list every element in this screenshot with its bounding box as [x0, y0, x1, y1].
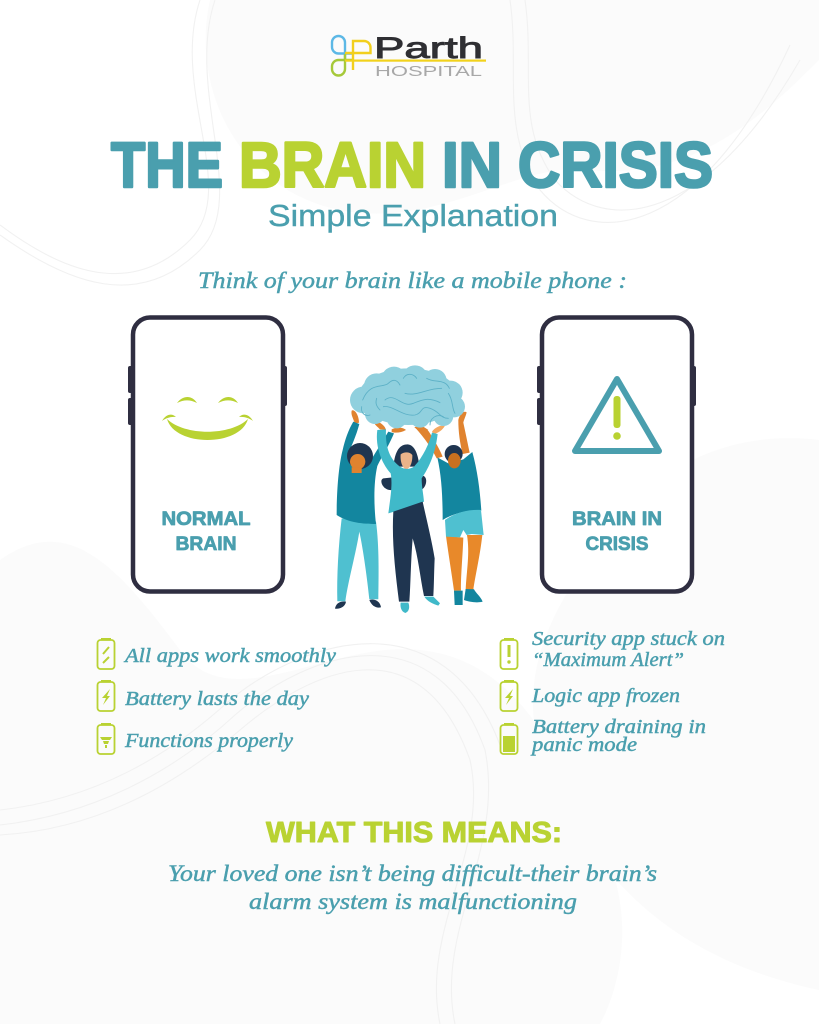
- phone label: NORMAL: [162, 508, 251, 530]
- logo subtitle: HOSPITAL: [375, 64, 482, 80]
- phone side buttons: [128, 366, 287, 425]
- icon: battery with wifi: [98, 723, 114, 754]
- item: logic app: Logic app frozen: [531, 686, 680, 707]
- illustration: three people lifting a brain: [335, 365, 484, 613]
- item: battery draining: panic mode: [530, 735, 637, 756]
- intro line: Think of your brain like a mobile phone :: [198, 268, 627, 294]
- phone label: BRAIN IN: [572, 508, 662, 530]
- icon: half-full battery: [500, 723, 518, 754]
- phone body: [133, 318, 283, 592]
- item: security app: [500, 629, 725, 671]
- item: all apps work smoothly: All apps work smoothly: [123, 646, 336, 667]
- center person: [373, 422, 445, 613]
- list: normal brain features: [98, 638, 336, 754]
- panel: normal brain phone: [128, 318, 287, 592]
- logo wordmark: Parth: [374, 32, 483, 65]
- item: all apps work smoothly: [98, 638, 336, 669]
- panel: brain in crisis phone: [537, 318, 696, 592]
- closing message: Your loved one isn’t being difficult-their brain’s: [168, 861, 657, 886]
- title: CRISIS: [518, 129, 713, 201]
- item: functions properly: [98, 723, 293, 754]
- item: battery lasts the day: [98, 680, 309, 711]
- icon: battery with bolt: [98, 680, 114, 711]
- item: logic app: [500, 680, 680, 711]
- phone label: BRAIN: [176, 533, 236, 555]
- item: battery lasts the day: Battery lasts the day: [125, 689, 309, 710]
- icon: battery with exclamation: [500, 638, 518, 669]
- item: security app: Security app stuck on: [532, 629, 725, 650]
- item: functions properly: Functions properly: [124, 731, 293, 752]
- right person: [415, 412, 484, 605]
- logo: Parth Hospital: [332, 32, 486, 80]
- subtitle: Simple Explanation: [268, 198, 558, 233]
- icon: smiling face: [162, 397, 253, 440]
- list: brain in crisis symptoms: [500, 629, 725, 756]
- title: THE: [111, 129, 223, 201]
- logo rule: [345, 60, 486, 62]
- title: BRAIN: [239, 129, 426, 201]
- phone label: CRISIS: [586, 533, 648, 555]
- title: IN: [442, 129, 502, 201]
- title: [111, 129, 713, 201]
- logo icon: [332, 36, 370, 76]
- heading: what this means: WHAT THIS MEANS:: [266, 817, 562, 849]
- icon: battery with bolt: [500, 680, 518, 711]
- icon: battery with sparks: [98, 638, 114, 669]
- icon: warning triangle: [575, 379, 659, 451]
- brain: [350, 365, 465, 428]
- phone body: [542, 318, 692, 592]
- item: security app: “Maximum Alert”: [532, 650, 684, 671]
- left person: [335, 410, 394, 609]
- item: battery draining: Battery draining in: [532, 717, 706, 738]
- item: battery draining: [500, 717, 706, 756]
- phone side buttons: [537, 366, 696, 425]
- closing message: alarm system is malfunctioning: [249, 889, 577, 914]
